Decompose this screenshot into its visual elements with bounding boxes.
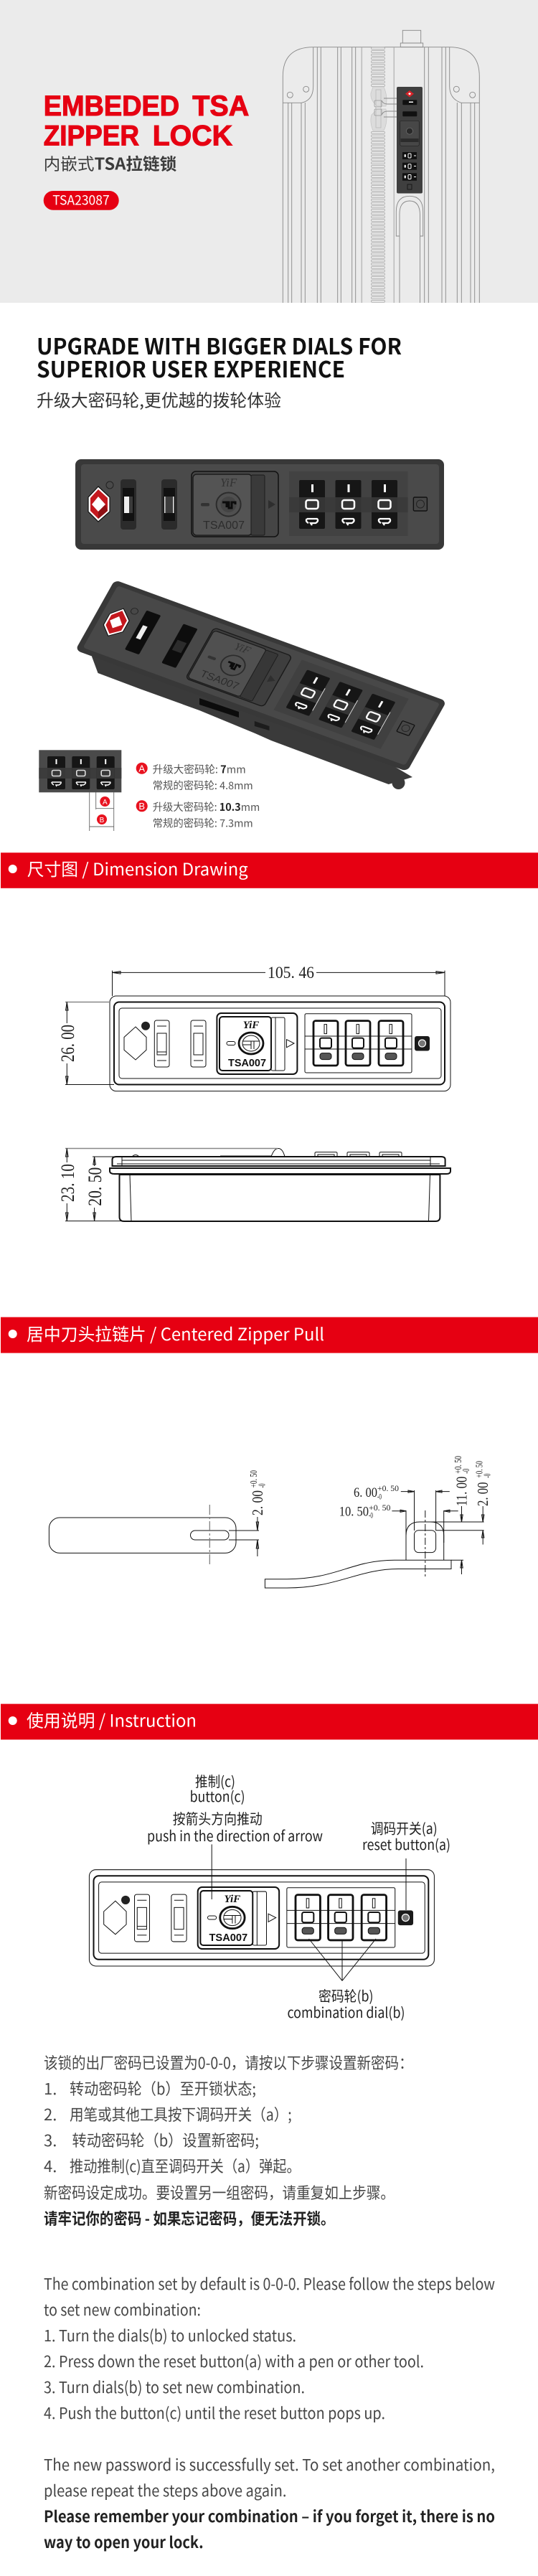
- angled lock face: TSA007: [198, 669, 241, 692]
- dimension: 20.50: [85, 1157, 117, 1221]
- instruction callout: combination dial b: [287, 1985, 405, 2022]
- english instructions text: to set new combination:: [44, 2298, 201, 2321]
- section band: centered zipper pull: 居中刀头拉链片 / Centered Zipper Pull: [27, 1320, 324, 1345]
- chinese instructions text: 转动密码轮（b）设置新密码;: [72, 2128, 259, 2151]
- dimension: 105.46: [112, 964, 445, 996]
- dial size legend: 升级大密码轮: 7mm: [153, 762, 246, 776]
- line drawing of lock front: YiF: [243, 1020, 259, 1031]
- instruction callout: button c: 按箭头方向推动: [173, 1808, 263, 1828]
- combination dials: [289, 471, 408, 536]
- english instructions text: 2. Press down the reset button(a) with a pen or other tool.: [44, 2349, 424, 2372]
- english instructions text: 4. Push the button(c) until the reset button pops up.: [44, 2401, 385, 2424]
- dimension: 10.50: [339, 1503, 390, 1520]
- section band: instruction: 使用说明 / Instruction: [27, 1706, 197, 1732]
- instruction lock line drawing: [89, 1870, 434, 1966]
- instruction callout: button c: [147, 1770, 323, 1846]
- dimension: 2.00: -0: [257, 1484, 268, 1488]
- english instructions text: The new password is successfully set. To set another combination,: [44, 2453, 495, 2476]
- dial size legend: 常规的密码轮: 4.8mm: [153, 778, 253, 793]
- chinese heading: 升级大密码轮,更优越的拨轮体验: [37, 386, 281, 412]
- english instructions text: 1. Turn the dials(b) to unlocked status.: [44, 2323, 296, 2346]
- dimension: 2.00: +0. 50: [475, 1461, 485, 1478]
- dial size diagram: [39, 750, 121, 831]
- english instructions text: way to open your lock.: [44, 2530, 204, 2553]
- title: embeded tsa zipper lock: ZIPPER: [44, 121, 139, 152]
- zipper sliders: [371, 87, 397, 131]
- chinese instructions text: 推动推制(c)直至调码开关（a）弹起。: [70, 2154, 301, 2177]
- dimension: 11.00: 11. 00: [453, 1477, 471, 1506]
- chinese instructions text: 新密码设定成功。要设置另一组密码，请重复如上步骤。: [44, 2181, 395, 2204]
- push button: [192, 471, 278, 537]
- chinese instructions text: 该锁的出厂密码已设置为0-0-0，请按以下步骤设置新密码：: [44, 2051, 413, 2074]
- dimension: 11.00: [453, 1456, 472, 1506]
- title: embeded tsa zipper lock: EMBEDED: [44, 90, 179, 122]
- dial size legend: A: [138, 763, 145, 774]
- lock photo: front view: [75, 459, 444, 550]
- push button: YiF: [220, 476, 237, 489]
- chinese instructions text: 1.: [44, 2077, 57, 2100]
- dimension: 2.00: [474, 1461, 494, 1506]
- dial size legend: 升级大密码轮: 10.3mm: [153, 799, 260, 814]
- dimension: 26.00: [57, 1002, 114, 1085]
- dimension: 6.00: -0: [377, 1491, 382, 1501]
- dial size diagram: B: [100, 817, 105, 824]
- dimension: 6.00: [354, 1483, 399, 1501]
- instruction callout: button c: push in the direction of arrow: [147, 1825, 323, 1846]
- instruction callout: reset button a: 调码开关(a): [371, 1818, 438, 1838]
- section band: centered zipper pull: [1, 1317, 538, 1353]
- dimension: 2.00: +0. 50: [249, 1470, 260, 1488]
- reset button: [413, 497, 427, 511]
- instruction callout: reset button a: [362, 1818, 450, 1854]
- title: embeded tsa zipper lock: LOCK: [153, 121, 232, 152]
- section band: dimension drawing: [1, 852, 538, 888]
- dimension: 23.10: 23. 10: [57, 1164, 78, 1202]
- lock photo: angled view: [75, 580, 447, 789]
- dimension: 105.46: 105. 46: [268, 964, 314, 982]
- dimension: 10.50: 10. 50: [339, 1504, 369, 1520]
- line drawing of lock front: TSA007: [228, 1057, 266, 1069]
- dial size diagram: A: [103, 799, 108, 807]
- chinese subtitle: 内嵌式TSA拉链锁: [44, 151, 176, 175]
- dimension drawing: top view: [57, 964, 450, 1091]
- title: embeded tsa zipper lock: TSA: [192, 90, 249, 122]
- zipper teeth: [371, 47, 385, 303]
- english instructions text: please repeat the steps above again.: [44, 2478, 287, 2501]
- chinese instructions text: 请牢记你的密码 - 如果忘记密码，便无法开锁。: [44, 2206, 334, 2229]
- instruction callout: reset button a: reset button(a): [362, 1833, 450, 1854]
- dimension: 10.50: -0: [369, 1510, 373, 1520]
- instruction lock line drawing: TSA007: [209, 1932, 247, 1944]
- slots: [121, 479, 177, 530]
- heading: upgrade with bigger dials: SUPERIOR USER EXPERIENCE: [37, 352, 345, 384]
- instruction callout: combination dial b: combination dial(b): [287, 2001, 405, 2022]
- dimension: 11.00: -0: [461, 1469, 472, 1474]
- instruction leader lines: [212, 1844, 406, 1980]
- lock on luggage: [397, 87, 423, 194]
- luggage line illustration: [283, 30, 479, 303]
- angled lock face: YiF: [232, 641, 253, 657]
- model pill: TSA23087: [52, 191, 110, 210]
- angled lock face: [75, 580, 447, 771]
- section band: dimension drawing: 尺寸图 / Dimension Drawing: [27, 855, 248, 880]
- section band: instruction: [1, 1704, 538, 1739]
- dimension: 6.00: 6. 00: [354, 1485, 377, 1500]
- heading: upgrade with bigger dials: UPGRADE WITH BIGGER DIALS FOR: [37, 329, 402, 361]
- dimension: 23.10: [57, 1148, 278, 1221]
- luggage handle arch: [396, 196, 423, 303]
- push button: TSA007: [203, 520, 245, 532]
- english instructions text: [44, 2272, 495, 2553]
- chinese instructions text: 用笔或其他工具按下调码开关（a）;: [70, 2102, 292, 2125]
- instruction callout: combination dial b: 密码轮(b): [318, 1985, 374, 2006]
- dimension: 11.00: +0. 50: [453, 1456, 464, 1474]
- dial size legend: 常规的密码轮: 7.3mm: [153, 815, 253, 831]
- dimension: 26.00: 26. 00: [57, 1025, 78, 1062]
- chinese instructions text: 4.: [44, 2154, 57, 2177]
- chinese instructions text: 3.: [44, 2128, 57, 2151]
- tsa logo: [88, 486, 110, 522]
- english instructions text: 3. Turn dials(b) to set new combination.: [44, 2375, 305, 2398]
- lock side wall: [92, 617, 412, 789]
- dimension: 2.00: -0: [482, 1474, 494, 1478]
- dimension: 10.50: +0. 50: [369, 1503, 390, 1513]
- english instructions text: Please remember your combination – if you forget it, there is no: [44, 2504, 495, 2527]
- dimension drawing: side view: [57, 1148, 450, 1221]
- dial size legend: [136, 762, 260, 831]
- line drawing of lock front: [110, 996, 450, 1091]
- title: embeded tsa zipper lock: [44, 90, 249, 152]
- english instructions text: The combination set by default is 0-0-0. Please follow the steps below: [44, 2272, 495, 2295]
- line drawing of lock side: [110, 1148, 450, 1221]
- dimension: 2.00: [249, 1470, 268, 1515]
- heading: upgrade with bigger dials: [37, 329, 402, 384]
- dimension: 6.00: +0. 50: [377, 1483, 399, 1493]
- instruction callout: button c: 推制(c): [195, 1770, 235, 1791]
- dimension: 2.00: 2. 00: [474, 1482, 491, 1506]
- chinese instructions text: 2.: [44, 2102, 57, 2125]
- dimension: 20.50: 20. 50: [85, 1167, 105, 1206]
- dimension: 2.00: 2. 00: [249, 1490, 266, 1515]
- dial size legend: B: [138, 801, 145, 812]
- zipper pull: side view: [265, 1456, 494, 1588]
- instruction callout: button c: button(c): [190, 1785, 245, 1806]
- chinese instructions text: [44, 2051, 413, 2229]
- instruction lock line drawing: YiF: [225, 1893, 240, 1905]
- zipper pull: plan view: [49, 1470, 268, 1565]
- chinese instructions text: 转动密码轮（b）至开锁状态;: [70, 2077, 256, 2100]
